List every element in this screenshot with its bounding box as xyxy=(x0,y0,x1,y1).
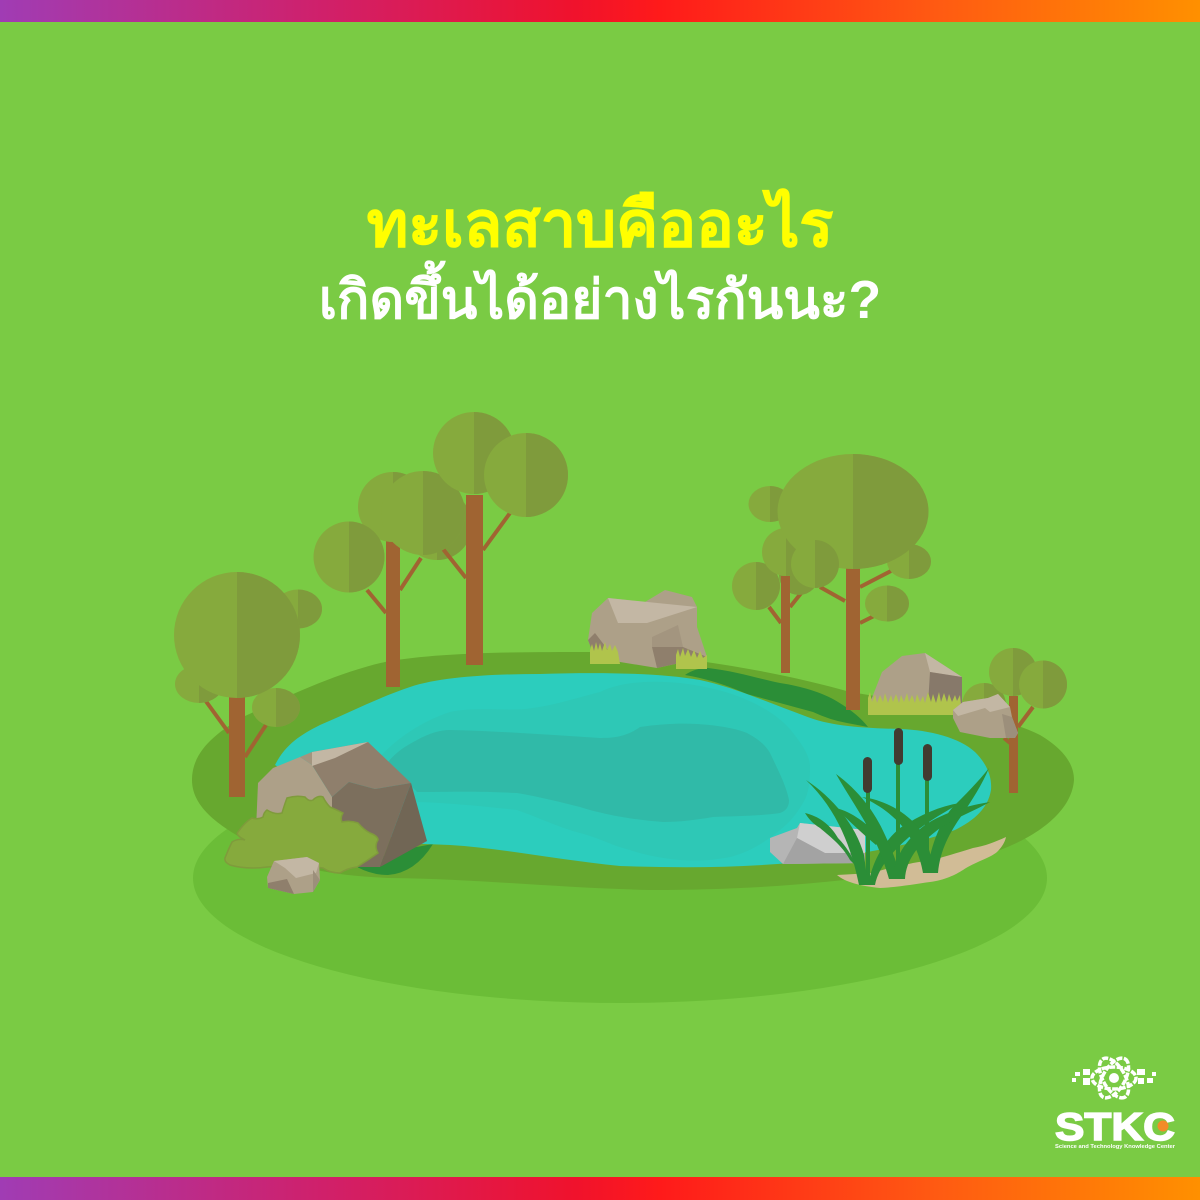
tree: far right xyxy=(962,648,1067,793)
STKC logo xyxy=(1055,1056,1176,1150)
tree: far left xyxy=(174,572,322,797)
logo orange dot xyxy=(1158,1120,1168,1132)
logo atom symbol xyxy=(1092,1053,1136,1103)
rock: small front left xyxy=(267,857,320,894)
grass tuft right xyxy=(676,648,707,669)
lake water xyxy=(275,673,991,867)
logo wordmark: STKC xyxy=(1055,1106,1175,1149)
tree: large right xyxy=(748,454,931,710)
water deep centre xyxy=(388,724,789,822)
tree: second xyxy=(314,472,428,687)
reed stems xyxy=(868,760,927,880)
cattail reeds xyxy=(805,728,990,885)
upper ground xyxy=(192,652,1074,890)
rock: top centre xyxy=(588,590,707,669)
rock: small right xyxy=(953,694,1018,738)
grass strip xyxy=(868,692,962,715)
tree: third, tallest left xyxy=(381,412,568,665)
dark green bank, left xyxy=(357,844,433,875)
logo tagline: Science and Technology Knowledge Center xyxy=(1055,1144,1176,1150)
lower ground ellipse xyxy=(193,753,1047,1003)
rock: grey xyxy=(770,823,865,864)
title block xyxy=(319,188,881,330)
grass tuft left xyxy=(590,642,620,664)
bush xyxy=(225,796,378,873)
title line 1: ทะเลสาบคืออะไร xyxy=(367,190,833,260)
reed leaves xyxy=(805,768,990,885)
cattail heads xyxy=(863,757,872,793)
bottom gradient bar xyxy=(0,1177,1200,1200)
top gradient bar xyxy=(0,0,1200,22)
sand bank xyxy=(837,837,1006,888)
rock: right with grass xyxy=(868,653,962,715)
water mid depth xyxy=(380,682,810,861)
title line 2: เกิดขึ้นได้อย่างไรกันนะ? xyxy=(319,271,881,330)
dark green bank, top right xyxy=(685,668,868,727)
rock: large left xyxy=(256,742,427,867)
logo pixel squares xyxy=(1072,1069,1156,1085)
tree: small, right of centre xyxy=(732,528,819,673)
